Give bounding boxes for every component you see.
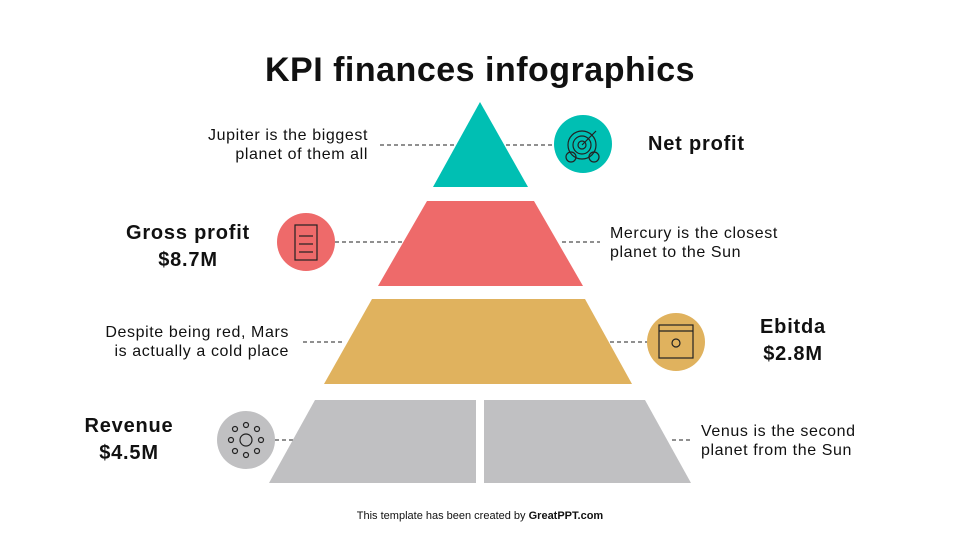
heading: revenue: [84, 415, 173, 464]
heading: net profit: Net profit: [648, 133, 745, 155]
text: mars: [105, 324, 289, 360]
heading: revenue: Revenue: [84, 415, 173, 437]
heading: ebitda: Ebitda: [760, 316, 826, 338]
tier: net profit: [433, 102, 528, 187]
tier: ebitda: [324, 299, 632, 384]
text: mercury: [610, 225, 778, 261]
text: mercury: Mercury is the closest: [610, 225, 778, 242]
text: venus: [701, 423, 856, 459]
text: jupiter: [208, 127, 368, 163]
icon: gross profit checklist: [277, 213, 335, 271]
title: KPI finances infographics: [265, 51, 695, 89]
text: mars: Despite being red, Mars: [105, 324, 289, 341]
heading: ebitda: $2.8M: [763, 343, 823, 365]
heading: ebitda: [760, 316, 826, 365]
tier: gross profit: [378, 201, 583, 286]
heading: gross profit: $8.7M: [158, 249, 218, 271]
tier: revenue: [269, 400, 691, 483]
text: jupiter: Jupiter is the biggest: [208, 127, 368, 144]
heading: gross profit: Gross profit: [126, 222, 250, 244]
heading: revenue: $4.5M: [99, 442, 159, 464]
text: mars: is actually a cold place: [114, 343, 289, 360]
heading: gross profit: [126, 222, 250, 271]
text: venus: Venus is the second: [701, 423, 856, 440]
text: venus: planet from the Sun: [701, 442, 852, 459]
icon: ebitda browser gear: [647, 313, 705, 371]
text: mercury: planet to the Sun: [610, 244, 741, 261]
text: jupiter: planet of them all: [235, 146, 368, 163]
icon: revenue network: [217, 411, 275, 469]
footer: This template has been created by GreatPPT.com: [357, 510, 603, 522]
icon: net profit target: [554, 115, 612, 173]
